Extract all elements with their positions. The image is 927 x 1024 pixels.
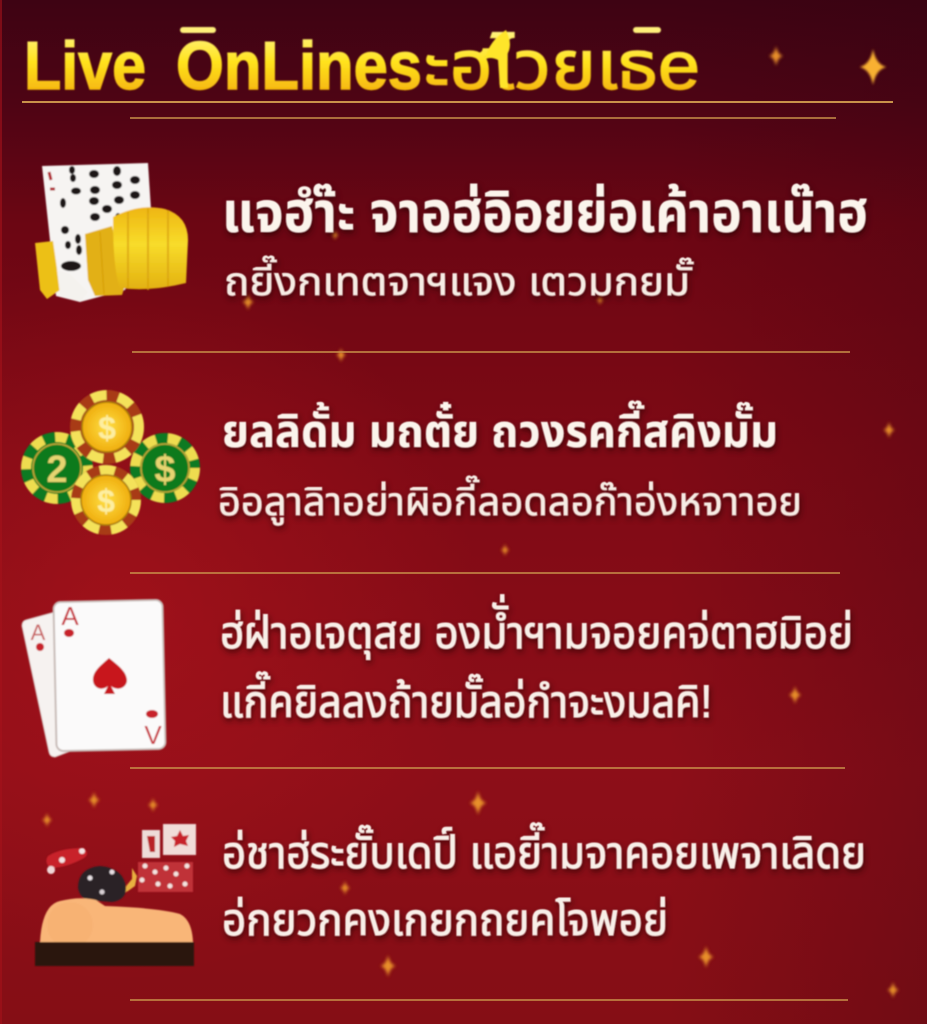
chip: bottom gold xyxy=(71,465,141,535)
text: row 4: อ่ชาฮ่ระยั๊บเดปิ์ แอยี๊ามจาคอยเพจาเลิดย xyxy=(222,822,866,878)
back card: A xyxy=(31,620,46,645)
red chips xyxy=(46,848,87,868)
divider xyxy=(132,351,850,353)
divider xyxy=(130,767,845,769)
icon: dealer at table xyxy=(35,824,196,966)
chip: right green xyxy=(130,433,200,503)
body xyxy=(40,898,193,942)
text: row 1: แจฮำ๊ะ จาอฮ่อิอยย่อเค้าอาเน๊าฮ xyxy=(222,181,868,245)
chip: top gold: $ xyxy=(98,410,116,446)
chip: bottom gold: $ xyxy=(97,483,115,519)
front card: A xyxy=(61,601,79,631)
icon: playing cards and gold stacks xyxy=(35,163,188,302)
title: ะฮไวยเธe xyxy=(424,28,700,104)
icon: casino chips xyxy=(21,390,200,535)
table xyxy=(35,942,194,966)
header divider lines xyxy=(22,102,893,118)
head xyxy=(78,866,126,902)
text: row 3 xyxy=(220,594,853,727)
cards xyxy=(163,824,196,855)
text: row 4: อ่กยวกคงเกยกถยคโจพอย่ xyxy=(222,894,668,945)
text: row 3: ฮ่ฝ่าอเจตุสย องมั่ำฯามจอยคจ่ตาฮมิอย่ xyxy=(220,594,853,660)
chip: top gold xyxy=(70,390,144,464)
title xyxy=(24,27,700,104)
sparkle: large star xyxy=(860,49,886,85)
icon: ace playing cards xyxy=(22,600,166,757)
text: row 3: แกี๊คยิลลงถ้ายมั๊ลอ่กำจะงมลคิ! xyxy=(220,671,712,727)
title: Live xyxy=(24,28,146,104)
text: row 1: ถยี๊งกเทตจาฯแจง เตวมกยมั๊ xyxy=(224,255,694,304)
text: row 1 xyxy=(222,181,868,304)
divider xyxy=(130,572,840,574)
text: row 2: ยลลิดั้ม มถตั๋ย ถวงรคกี๊สคิงมั๊ม xyxy=(222,400,778,457)
front card: V xyxy=(144,720,162,750)
chip: left green: 2 xyxy=(46,449,68,491)
title: OnLines xyxy=(176,28,422,104)
text: row 2: อิอลูาลิาอย่าผิอกี๊ลอดลอก๊าอ่งหจาาอย xyxy=(218,475,802,525)
back card xyxy=(22,612,78,757)
text: row 4 xyxy=(222,822,866,945)
footer divider xyxy=(130,999,848,1001)
text: row 2 xyxy=(218,400,802,525)
chip: left green xyxy=(21,432,93,504)
chip: right green: $ xyxy=(154,449,176,491)
front card xyxy=(53,600,166,751)
